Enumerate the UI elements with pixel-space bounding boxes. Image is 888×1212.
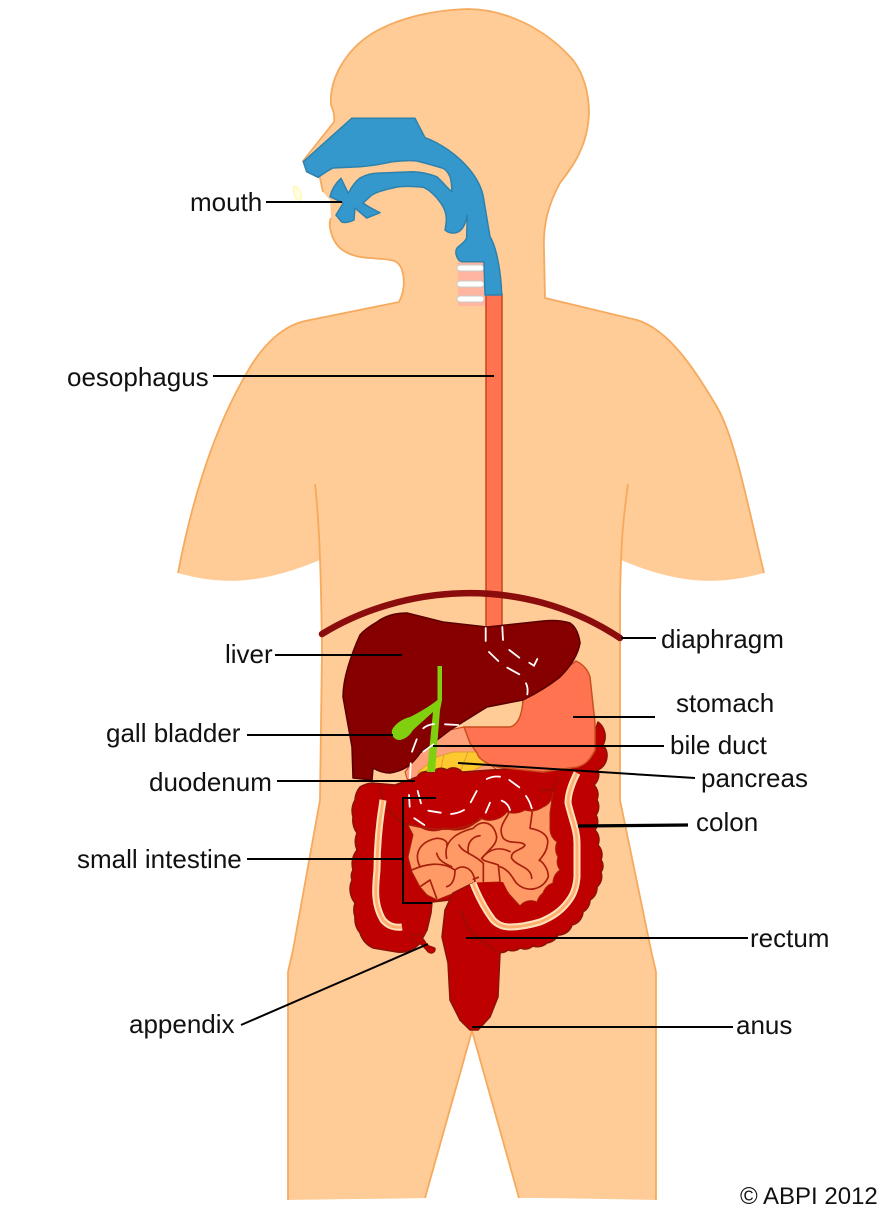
large intestine (colon) bbox=[350, 722, 607, 953]
body silhouette bbox=[178, 9, 764, 1200]
label: stomach: stomach bbox=[676, 688, 774, 718]
diaphragm bbox=[322, 593, 620, 638]
label: oesophagus: oesophagus bbox=[67, 362, 209, 392]
oesophagus tube bbox=[486, 294, 502, 629]
label: colon: colon bbox=[696, 807, 758, 837]
copyright: © ABPI 2012 bbox=[740, 1183, 878, 1210]
label: duodenum: duodenum bbox=[149, 767, 272, 797]
label: mouth: mouth bbox=[190, 187, 262, 217]
small intestine loops bbox=[410, 808, 548, 898]
label: liver: liver bbox=[225, 639, 273, 669]
trachea with cartilage rings bbox=[457, 260, 485, 306]
label: rectum: rectum bbox=[750, 923, 829, 953]
pancreas bbox=[418, 752, 486, 774]
white dashes: hidden passages bbox=[409, 627, 537, 825]
icon: tooth bbox=[293, 186, 302, 200]
colon inner tube, descending and sigmoid bbox=[473, 773, 577, 927]
mouth and throat cavity bbox=[303, 118, 502, 295]
label: pancreas: pancreas bbox=[701, 763, 808, 793]
duodenum bbox=[405, 727, 500, 788]
label: diaphragm: diaphragm bbox=[661, 624, 784, 654]
appendix bbox=[411, 935, 435, 953]
label: appendix: appendix bbox=[129, 1009, 235, 1039]
colon inner tube, ascending bbox=[376, 800, 402, 927]
label: anus: anus bbox=[736, 1010, 792, 1040]
label: gall bladder: gall bladder bbox=[106, 718, 241, 748]
stomach bbox=[464, 661, 595, 772]
colon seams bbox=[380, 777, 558, 826]
label: small intestine: small intestine bbox=[77, 844, 242, 874]
liver bbox=[343, 613, 580, 780]
rectum and anus bbox=[442, 882, 520, 1030]
leader lines bbox=[213, 202, 748, 1027]
label: bile duct: bile duct bbox=[670, 730, 768, 760]
gall bladder and bile duct bbox=[392, 666, 442, 772]
small intestine bbox=[408, 792, 560, 906]
